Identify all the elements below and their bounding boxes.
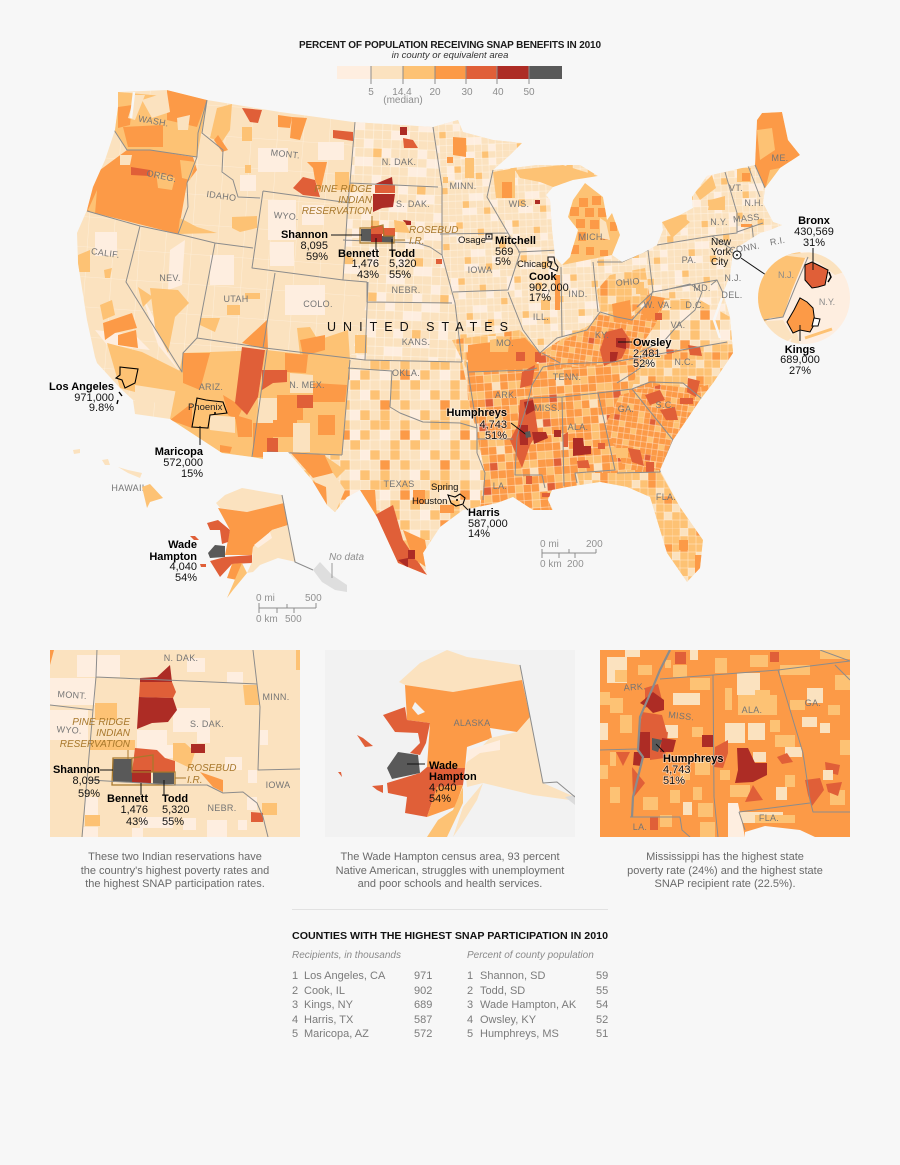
table: recipients in thousands: Los Angeles, CA (304, 970, 386, 982)
panel: South Dakota inset: Bennett (107, 793, 148, 805)
labels: state names: N. DAK. (382, 157, 416, 167)
inset: new york city (758, 248, 850, 344)
labels: state names: VT. (729, 183, 743, 193)
labels: state names: MICH. (578, 232, 606, 242)
table: percent of county population: Owsley, KY (480, 1014, 537, 1026)
panel: Mississippi inset: ARK. (623, 681, 646, 693)
panel: South Dakota inset: MONT. (57, 689, 87, 701)
label: Bennett (338, 248, 379, 281)
labels: state names: CONN. (729, 240, 760, 256)
label: Spring, Houston, Harris (412, 482, 508, 540)
labels: state names: MD. (693, 283, 711, 293)
label: United States: UNITED STATES (327, 320, 508, 334)
labels: state names: N.J. (724, 273, 742, 283)
panel: Mississippi inset: FLA. (759, 813, 779, 823)
panel: Mississippi inset (600, 650, 850, 837)
labels: state names: HAWAII (111, 483, 145, 493)
label: Osage and Mitchell: Osage (458, 235, 486, 246)
panel: Alaska inset: ALASKA (454, 718, 490, 728)
panel: South Dakota inset: 43% (126, 816, 148, 828)
scale bar: contiguous us: 0 km (540, 559, 562, 570)
panel: South Dakota inset: 55% (162, 816, 184, 828)
labels: state names: WASH. (138, 113, 169, 129)
panel: South Dakota inset: PINE RIDGE (72, 717, 130, 728)
panel: South Dakota inset: RESERVATION (60, 739, 131, 750)
labels: state names: CALIF. (90, 246, 120, 260)
table: percent of county population: Humphreys, MS (480, 1028, 559, 1040)
caption: Mississippi: Mississippi has the highest state (646, 851, 804, 863)
table heading: COUNTIES WITH THE HIGHEST SNAP PARTICIPATION IN 2010 (292, 930, 608, 942)
label: Bronx: 31% (803, 237, 825, 249)
label: Wade Hampton: 4,040 (169, 561, 197, 573)
panel: Alaska inset: Hampton (429, 771, 477, 783)
label: Owsley: Owsley (633, 337, 672, 349)
panel: South Dakota inset (50, 649, 300, 837)
labels: state names: KANS. (402, 337, 430, 347)
labels: state names: UTAH (223, 294, 249, 304)
label: Wade Hampton: 54% (175, 572, 197, 584)
label: Maricopa: 15% (181, 468, 203, 480)
labels: state names: IDAHO (206, 189, 237, 203)
panel: Mississippi inset: MISS. (668, 710, 695, 722)
label: Chicago and Cook: 17% (529, 292, 551, 304)
appalachia hot spot (600, 328, 630, 366)
label: Chicago and Cook: 902,000 (529, 282, 569, 294)
labels: state names: MO. (496, 338, 514, 348)
table: percent of county population: 4 (467, 1014, 473, 1026)
panel: South Dakota inset: WYO. (56, 724, 82, 736)
table: recipients in thousands: 2 (292, 985, 298, 997)
caption: reservations: the highest SNAP participation rates. (85, 878, 265, 890)
label: Chicago and Cook (517, 257, 569, 304)
scale bar: contiguous us: 200 (586, 539, 603, 550)
legend: colour scale: 14.4 (392, 87, 412, 98)
panel: South Dakota inset: S. DAK. (190, 719, 224, 729)
labels: state names: WIS. (509, 199, 529, 209)
panel: South Dakota inset: 5,320 (162, 804, 190, 816)
label: Spring, Houston, Harris: Harris (468, 507, 500, 519)
labels: state names: GA. (618, 404, 634, 414)
scale bar: alaska: 500 (285, 614, 302, 625)
labels: state names: ALASKA (237, 527, 273, 537)
labels: state names: TENN. (553, 372, 581, 382)
label: Maricopa (155, 398, 227, 480)
labels: state names: MISS. (534, 403, 560, 413)
label: Todd: 55% (389, 269, 411, 281)
panel: South Dakota inset: 8,095 (72, 775, 100, 787)
panel: Mississippi inset: GA. (805, 698, 821, 708)
caption: reservations: These two Indian reservations have (88, 851, 262, 863)
label: Owsley (618, 337, 672, 370)
labels: state names: ILL. (533, 312, 549, 322)
panel: South Dakota inset: IOWA (266, 780, 290, 790)
panel: Mississippi inset: ALA. (742, 705, 762, 715)
table: percent of county population: 3 (467, 999, 473, 1011)
table: percent of county population: 1 (467, 970, 473, 982)
table: recipients in thousands: Cook, IL (304, 985, 345, 997)
panel: Mississippi inset: 51% (663, 775, 685, 787)
label: Rosebud reservation (409, 225, 458, 247)
scale bar: contiguous us: 200 (567, 559, 584, 570)
labels: state names: COLO. (303, 299, 333, 309)
table: percent of county population: Wade Hampton, AK (480, 999, 577, 1011)
label: Rosebud reservation: I.R. (409, 236, 425, 247)
label: Shannon: 8,095 (300, 240, 328, 252)
label: Chicago and Cook: Cook (529, 271, 557, 283)
table: recipients in thousands: 971 (414, 970, 432, 982)
label: Rosebud reservation: ROSEBUD (409, 225, 458, 236)
labels: state names: OHIO (615, 276, 640, 288)
plains accents (375, 177, 393, 185)
label: Shannon: Shannon (281, 229, 328, 241)
legend: colour scale (337, 66, 562, 106)
panel: South Dakota inset: NEBR. (207, 803, 237, 813)
table: recipients in thousands: Harris, TX (304, 1014, 354, 1026)
labels: state names: NEBR. (391, 285, 421, 295)
label: Osage and Mitchell: 569 (495, 246, 513, 258)
alaska (190, 488, 313, 598)
table: recipients in thousands: 689 (414, 999, 432, 1011)
label: Wade Hampton (149, 539, 197, 584)
florida accents (695, 555, 702, 573)
table: percent of county population (467, 950, 608, 1040)
label: Humphreys: 4,743 (479, 419, 507, 431)
table: percent of county population: 55 (596, 985, 608, 997)
label: Bronx: Bronx (798, 215, 831, 227)
caption: reservations: the country's highest poverty rates and (81, 865, 269, 877)
table: percent of county population: 54 (596, 999, 608, 1011)
label: Todd: 5,320 (389, 258, 417, 270)
labels: state names: FLA. (656, 492, 676, 502)
labels: state names: MINN. (450, 181, 476, 191)
label: Bronx: 430,569 (794, 226, 834, 238)
label: Los Angeles (49, 367, 138, 414)
caption: Mississippi: SNAP recipient rate (22.5%). (654, 878, 796, 890)
panel: Alaska inset (325, 650, 575, 837)
labels: state names: W. VA. (644, 300, 672, 310)
table: recipients in thousands: 5 (292, 1028, 298, 1040)
labels: state names: MONT. (270, 148, 301, 161)
west patches (268, 200, 296, 240)
panel: South Dakota inset: ROSEBUD (187, 763, 236, 774)
caption: Mississippi (627, 851, 823, 890)
upper midwest accents (453, 137, 466, 157)
panel: South Dakota inset: Todd (162, 793, 188, 805)
table: recipients in thousands: 902 (414, 985, 432, 997)
panel: South Dakota inset: MINN. (262, 692, 290, 702)
labels: state names: ALA. (568, 422, 588, 432)
labels: state names: S.C. (656, 400, 674, 410)
arizona and new mexico (170, 350, 267, 457)
labels: state names: VA. (671, 320, 685, 330)
labels: state names: N.H. (744, 198, 764, 208)
labels: state names: N.Y. (710, 217, 728, 227)
labels: state names: ARK. (495, 390, 517, 400)
label: New York City (711, 237, 766, 275)
label: Los Angeles: Los Angeles (49, 381, 114, 393)
legend: colour scale: 30 (461, 87, 473, 98)
table: recipients in thousands: 4 (292, 1014, 298, 1026)
panel: Alaska inset: 54% (429, 793, 451, 805)
inset: new york city: N.J. (778, 270, 794, 280)
choropleth map: contiguous United States (60, 80, 820, 600)
washington and oregon (114, 92, 207, 157)
panel: South Dakota inset: INDIAN (96, 728, 131, 739)
labels: state names: IND. (568, 289, 588, 299)
caption: Mississippi: poverty rate (24%) and the highest state (627, 865, 823, 877)
table: percent of county population: Percent of county population (467, 950, 594, 961)
labels: state names: LA. (493, 481, 507, 491)
hawaii (73, 449, 163, 508)
labels: state names: D.C. (685, 300, 705, 310)
west and south texas (290, 452, 333, 478)
ohio valley and missouri (612, 300, 632, 322)
label: Osage and Mitchell: 5% (495, 256, 511, 268)
caption: Wade Hampton (336, 851, 564, 890)
labels: state names: IOWA (468, 265, 492, 275)
california, nevada, utah, colorado (78, 250, 90, 272)
label: Kings: 689,000 (780, 354, 820, 366)
panel: South Dakota inset: N. DAK. (164, 653, 198, 663)
alaska panhandle: no data (313, 562, 347, 592)
table: recipients in thousands: Maricopa, AZ (304, 1028, 369, 1040)
label: Bronx (794, 215, 834, 249)
label: Shannon (281, 229, 328, 263)
label: Pine Ridge reservation (302, 184, 373, 217)
scale bar: alaska: 500 (305, 593, 322, 604)
panel: Mississippi inset: 4,743 (663, 764, 691, 776)
panel: Alaska inset: Wade (429, 760, 458, 772)
labels: state names: N.C. (674, 357, 694, 367)
panel: Mississippi inset: LA. (633, 822, 647, 832)
label: Owsley: 52% (633, 358, 655, 370)
labels: state names: DEL. (721, 290, 743, 300)
legend: colour scale: 20 (429, 87, 441, 98)
caption: reservations (81, 851, 269, 890)
scale bar: contiguous us (540, 539, 603, 570)
label: Kings: 27% (789, 365, 811, 377)
label: Kings: Kings (785, 344, 815, 356)
label: Shannon: 59% (306, 251, 328, 263)
label: Maricopa: 572,000 (163, 457, 203, 469)
idaho and montana (178, 218, 217, 234)
new england (755, 112, 800, 188)
labels: state names: NEV. (159, 273, 181, 283)
callout: reservation counties (331, 216, 405, 250)
label: Wade Hampton: Hampton (149, 551, 197, 563)
label: Bennett: 43% (357, 269, 379, 281)
table: percent of county population: 2 (467, 985, 473, 997)
labels: state names: KY. (595, 330, 609, 340)
label: Spring, Houston, Harris: 587,000 (468, 518, 508, 530)
inset: new york city: N.Y. (819, 297, 835, 307)
label: Osage and Mitchell (458, 234, 536, 268)
labels: state names: R.I. (769, 235, 786, 247)
title: PERCENT OF POPULATION RECEIVING SNAP BENEFITS IN 2010 (299, 40, 601, 51)
labels: state names: N. MEX. (289, 380, 325, 390)
delta (520, 365, 535, 388)
legend: colour scale: 5 (368, 87, 374, 98)
panel: Alaska inset: 4,040 (429, 782, 457, 794)
legend: colour scale: 50 (523, 87, 535, 98)
label: Osage and Mitchell: Mitchell (495, 235, 536, 247)
label: Wade Hampton: Wade (168, 539, 197, 551)
panel: South Dakota inset: 59% (78, 788, 100, 800)
label: Spring, Houston, Harris: Spring (431, 482, 458, 493)
table: recipients in thousands: Recipients, in thousands (292, 950, 401, 961)
label: Maricopa: Phoenix (188, 402, 223, 413)
labels: state names: WYO. (273, 210, 299, 222)
table: recipients in thousands (292, 950, 432, 1040)
scale bar: alaska: 0 km (256, 614, 278, 625)
labels: state names: S. DAK. (396, 199, 430, 209)
table: percent of county population: Todd, SD (480, 985, 525, 997)
label: Pine Ridge reservation: RESERVATION (302, 206, 373, 217)
table: recipients in thousands: 1 (292, 970, 298, 982)
caption: Wade Hampton: and poor schools and health services. (358, 878, 542, 890)
table: percent of county population: 59 (596, 970, 608, 982)
table: percent of county population: 5 (467, 1028, 473, 1040)
label: Humphreys (446, 407, 531, 442)
label: New York City: York (711, 247, 732, 258)
label: Kings (780, 344, 820, 377)
label: Pine Ridge reservation: INDIAN (338, 195, 373, 206)
panel: Mississippi inset: Humphreys (663, 753, 724, 765)
table: recipients in thousands: 587 (414, 1014, 432, 1026)
labels: state names: MASS. (732, 212, 763, 225)
state borders (87, 100, 765, 500)
label: Spring, Houston, Harris: Houston (412, 496, 447, 507)
labels: state names: ME. (772, 153, 788, 163)
label: Los Angeles: 971,000 (74, 392, 114, 404)
panel: South Dakota inset: I.R. (187, 775, 203, 786)
label: New York City: New (711, 237, 732, 248)
labels: state names: PA. (682, 255, 696, 265)
scale bar: alaska (256, 593, 322, 625)
label: Bennett: 1,476 (351, 258, 379, 270)
scale bar: contiguous us: 0 mi (540, 539, 559, 550)
label: New York City: City (711, 257, 728, 268)
labels: state names: OKLA. (392, 368, 420, 378)
label: Todd: Todd (389, 248, 415, 260)
labels: state names: TEXAS (383, 479, 415, 489)
labels: state names (90, 113, 788, 537)
table: percent of county population: 51 (596, 1028, 608, 1040)
no data label (329, 552, 364, 578)
table: recipients in thousands: 3 (292, 999, 298, 1011)
label: Los Angeles: 9.8% (89, 402, 114, 414)
label: Humphreys: 51% (485, 430, 507, 442)
caption: Wade Hampton: The Wade Hampton census area, 93 percent (340, 851, 560, 863)
label: Owsley: 2,481 (633, 348, 661, 360)
carolinas (687, 378, 700, 397)
caption: Wade Hampton: Native American, struggles with unemployment (336, 865, 564, 877)
label: Bennett: Bennett (338, 248, 379, 260)
scale bar: alaska: 0 mi (256, 593, 275, 604)
panel: South Dakota inset: Shannon (53, 764, 100, 776)
panel: South Dakota inset: 1,476 (120, 804, 148, 816)
label: Chicago and Cook: Chicago (517, 259, 552, 270)
labels: state names: ARIZ. (199, 382, 223, 392)
label: Spring, Houston, Harris: 14% (468, 528, 490, 540)
label: Todd (389, 248, 417, 281)
label: Humphreys: Humphreys (446, 407, 507, 419)
subtitle: in county or equivalent area (392, 50, 508, 61)
table: recipients in thousands: 572 (414, 1028, 432, 1040)
legend: colour scale: (median) (383, 95, 423, 106)
legend: colour scale: 40 (492, 87, 504, 98)
table: recipients in thousands: Kings, NY (304, 999, 354, 1011)
michigan (562, 183, 620, 265)
table: percent of county population: 52 (596, 1014, 608, 1026)
table: percent of county population: Shannon, SD (480, 970, 545, 982)
no data label: No data (329, 552, 364, 563)
labels: state names: OREG. (146, 168, 178, 184)
label: Pine Ridge reservation: PINE RIDGE (314, 184, 372, 195)
label: Maricopa: Maricopa (155, 446, 204, 458)
